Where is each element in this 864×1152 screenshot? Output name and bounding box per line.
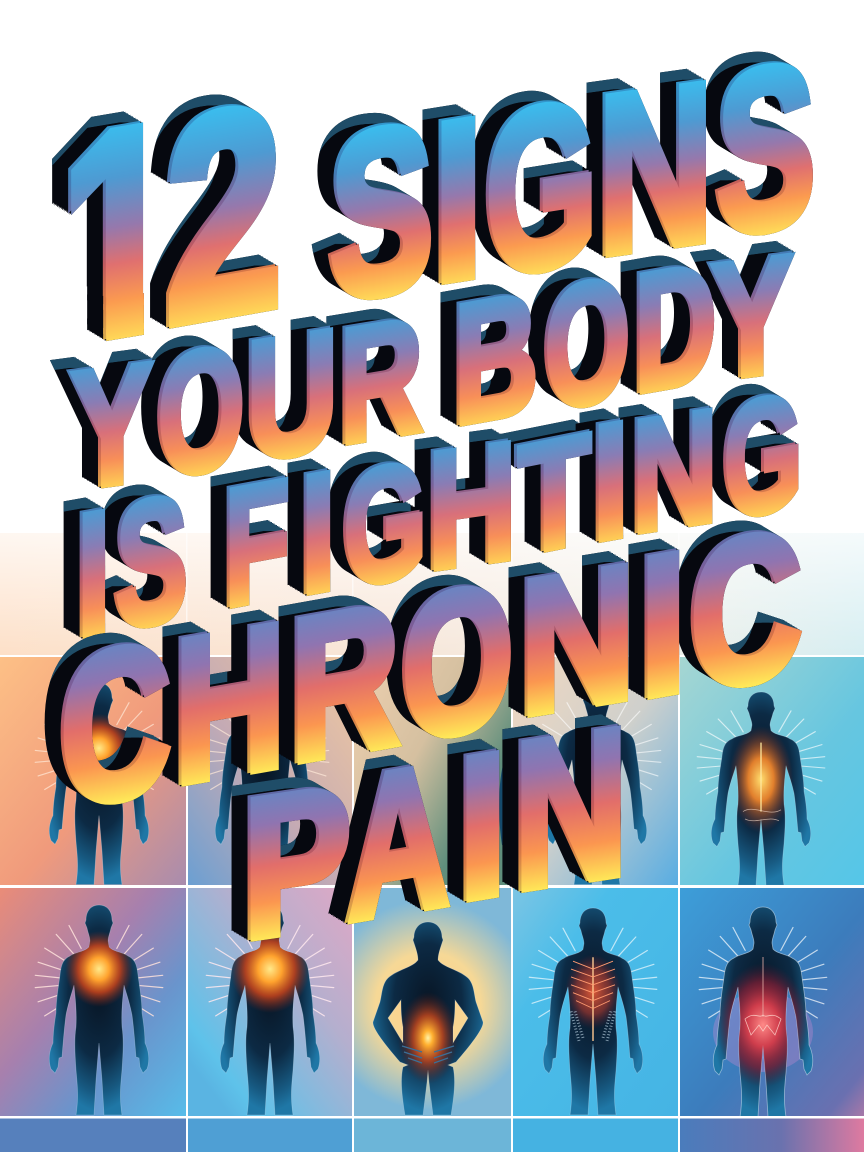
title line 1: 12 SIGNS: 2 <box>166 42 282 385</box>
figure: row 1 column 5 with spine glow <box>697 692 825 885</box>
title line 4: CHRONIC: C <box>60 596 172 854</box>
title line 4: CHRONIC: I <box>639 510 687 740</box>
title line 1: 12 SIGNS: G <box>486 51 598 325</box>
title line 1: 12 SIGNS: N <box>598 34 714 303</box>
title line 4: CHRONIC <box>60 485 802 854</box>
title line 2: YOUR BODY: B <box>454 256 538 462</box>
title line 2: YOUR BODY: D <box>634 226 717 429</box>
title line 3: IS FIGHTING: I <box>301 435 336 630</box>
title line 2: YOUR BODY: U <box>247 293 338 497</box>
title line 4: CHRONIC: H <box>174 579 286 828</box>
figure: row 1 column 1 <box>35 683 163 885</box>
title line 5: PAIN: N <box>514 682 628 935</box>
title line 3: IS FIGHTING: I <box>77 474 111 675</box>
title line 1: 12 SIGNS: I <box>433 69 484 330</box>
title line 1: 12 SIGNS <box>52 52 813 342</box>
title line 1: 12 SIGNS: S <box>330 74 434 351</box>
title line 3: IS FIGHTING: N <box>632 376 718 568</box>
title line 3: IS FIGHTING <box>77 358 803 675</box>
figure: row 2 column 2 with chest glow <box>206 905 334 1115</box>
title line 4: CHRONIC: R <box>290 560 400 806</box>
title line 2: YOUR BODY: Y <box>71 328 153 525</box>
figure: row 1 column 4 <box>533 683 661 885</box>
title line 5: PAIN: P <box>243 743 352 981</box>
title line 3: IS FIGHTING: H <box>428 407 517 606</box>
title line 1: 12 SIGNS: S <box>717 14 816 286</box>
title line 3: IS FIGHTING: F <box>225 443 290 642</box>
title line 3: IS FIGHTING: S <box>116 458 188 667</box>
title line 5: PAIN: A <box>348 721 450 964</box>
title line 2: YOUR BODY <box>71 220 793 525</box>
title line 4: CHRONIC: C <box>690 485 802 735</box>
title line 2: YOUR BODY: Y <box>711 220 793 415</box>
title line 3: IS FIGHTING: T <box>518 400 591 588</box>
title line 5: PAIN: I <box>458 708 508 944</box>
figure: row 2 column 1 with chest glow <box>35 905 163 1115</box>
title line 5: PAIN <box>243 682 628 981</box>
title line 3: IS FIGHTING: G <box>724 358 803 554</box>
title line 3: IS FIGHTING: G <box>344 427 427 623</box>
title line 2: YOUR BODY: O <box>545 240 630 447</box>
figure: row 1 column 3 arm fragment <box>499 760 514 850</box>
title line 1: 12 SIGNS: 1 <box>61 60 178 406</box>
title line 3: IS FIGHTING: I <box>592 386 629 576</box>
figure: row 1 column 2 <box>201 683 329 885</box>
figure: row 2 column 5 with pelvis glow <box>699 907 827 1117</box>
title line 4: CHRONIC: N <box>520 523 636 757</box>
figure: row 2 column 4 with ribs and spine <box>529 908 657 1115</box>
title line 4: CHRONIC: O <box>402 539 514 785</box>
grid lines <box>0 533 864 1152</box>
title line 2: YOUR BODY: O <box>158 307 245 515</box>
title line 2: YOUR BODY: R <box>340 284 423 479</box>
figure: row 2 column 3 hands on abdomen <box>373 922 483 1115</box>
